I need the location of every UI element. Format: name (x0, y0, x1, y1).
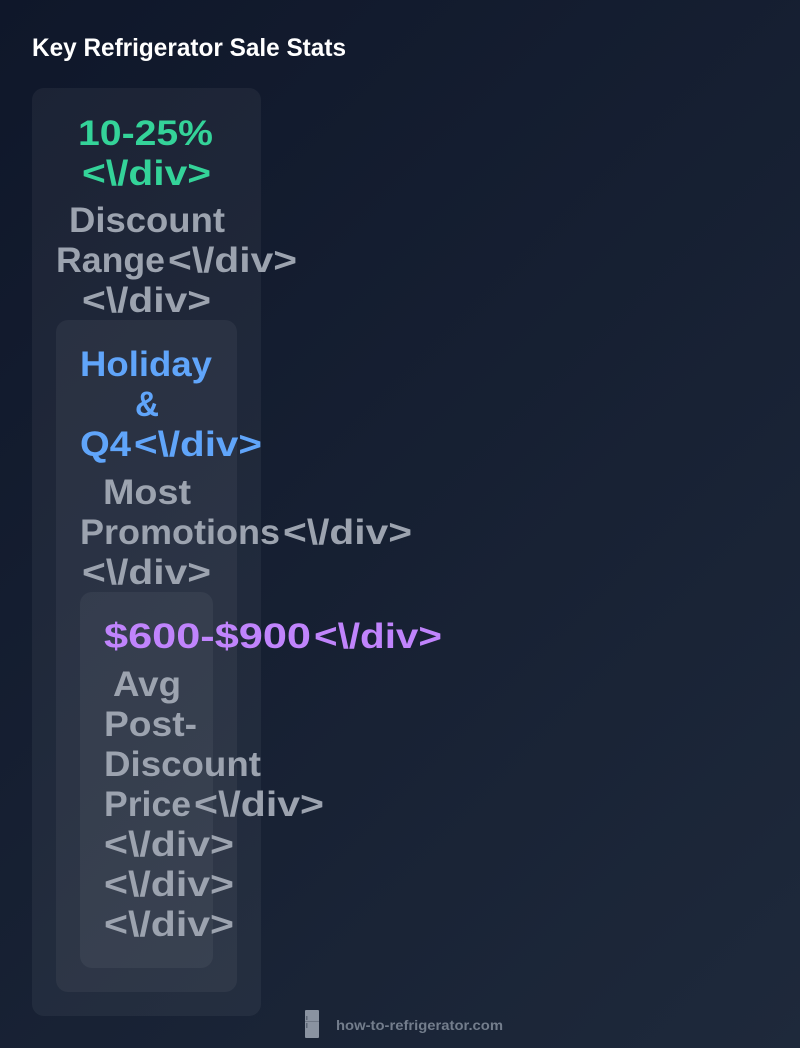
stat: promotions label: Most (103, 473, 191, 512)
footer: site name: how-to-refrigerator.com (336, 1017, 503, 1033)
stat: average price label: <\/div> (104, 825, 234, 864)
stat: average price value: $600-$900 (104, 617, 311, 656)
panel: outer stat card (32, 88, 442, 1016)
stat: average price label: <\/div> (104, 905, 234, 944)
stat: promotions label: <\/div> (283, 513, 412, 552)
stat: average price value: <\/div> (314, 617, 442, 656)
stat: average price label: <\/div> (104, 865, 234, 904)
title: Key Refrigerator Sale Stats (32, 34, 346, 62)
stat: promotions value: Holiday (80, 345, 213, 384)
stat: discount range value: 10-25% (78, 114, 213, 153)
stat: promotions label: <\/div> (82, 553, 211, 592)
panel: inner stat card (80, 592, 442, 968)
stat: promotions value (80, 345, 262, 464)
stat: discount range label (56, 201, 297, 320)
stat: discount range label: Range (56, 241, 165, 280)
stat: promotions value: <\/div> (134, 425, 262, 464)
panel: middle stat card (56, 320, 442, 992)
stat: discount range value: <\/div> (82, 154, 211, 193)
stat: promotions value: & (135, 385, 159, 424)
stat: discount range label: <\/div> (82, 281, 211, 320)
stat: average price label: <\/div> (194, 785, 324, 824)
stat: discount range label: Discount (69, 201, 225, 240)
stat: average price label: Post- (104, 705, 197, 744)
stat: average price label: Discount (104, 745, 261, 784)
stat: average price label: Price (104, 785, 191, 824)
stat: promotions value: Q4 (80, 425, 132, 464)
icon: refrigerator (305, 1010, 319, 1038)
stat: promotions label: Promotions (80, 513, 280, 552)
stat: average price value (104, 617, 442, 656)
stat: discount range label: <\/div> (168, 241, 297, 280)
stat: promotions label (80, 473, 412, 592)
stat: average price label (104, 665, 324, 944)
stat: discount range value (78, 114, 213, 193)
stat: average price label: Avg (113, 665, 181, 704)
